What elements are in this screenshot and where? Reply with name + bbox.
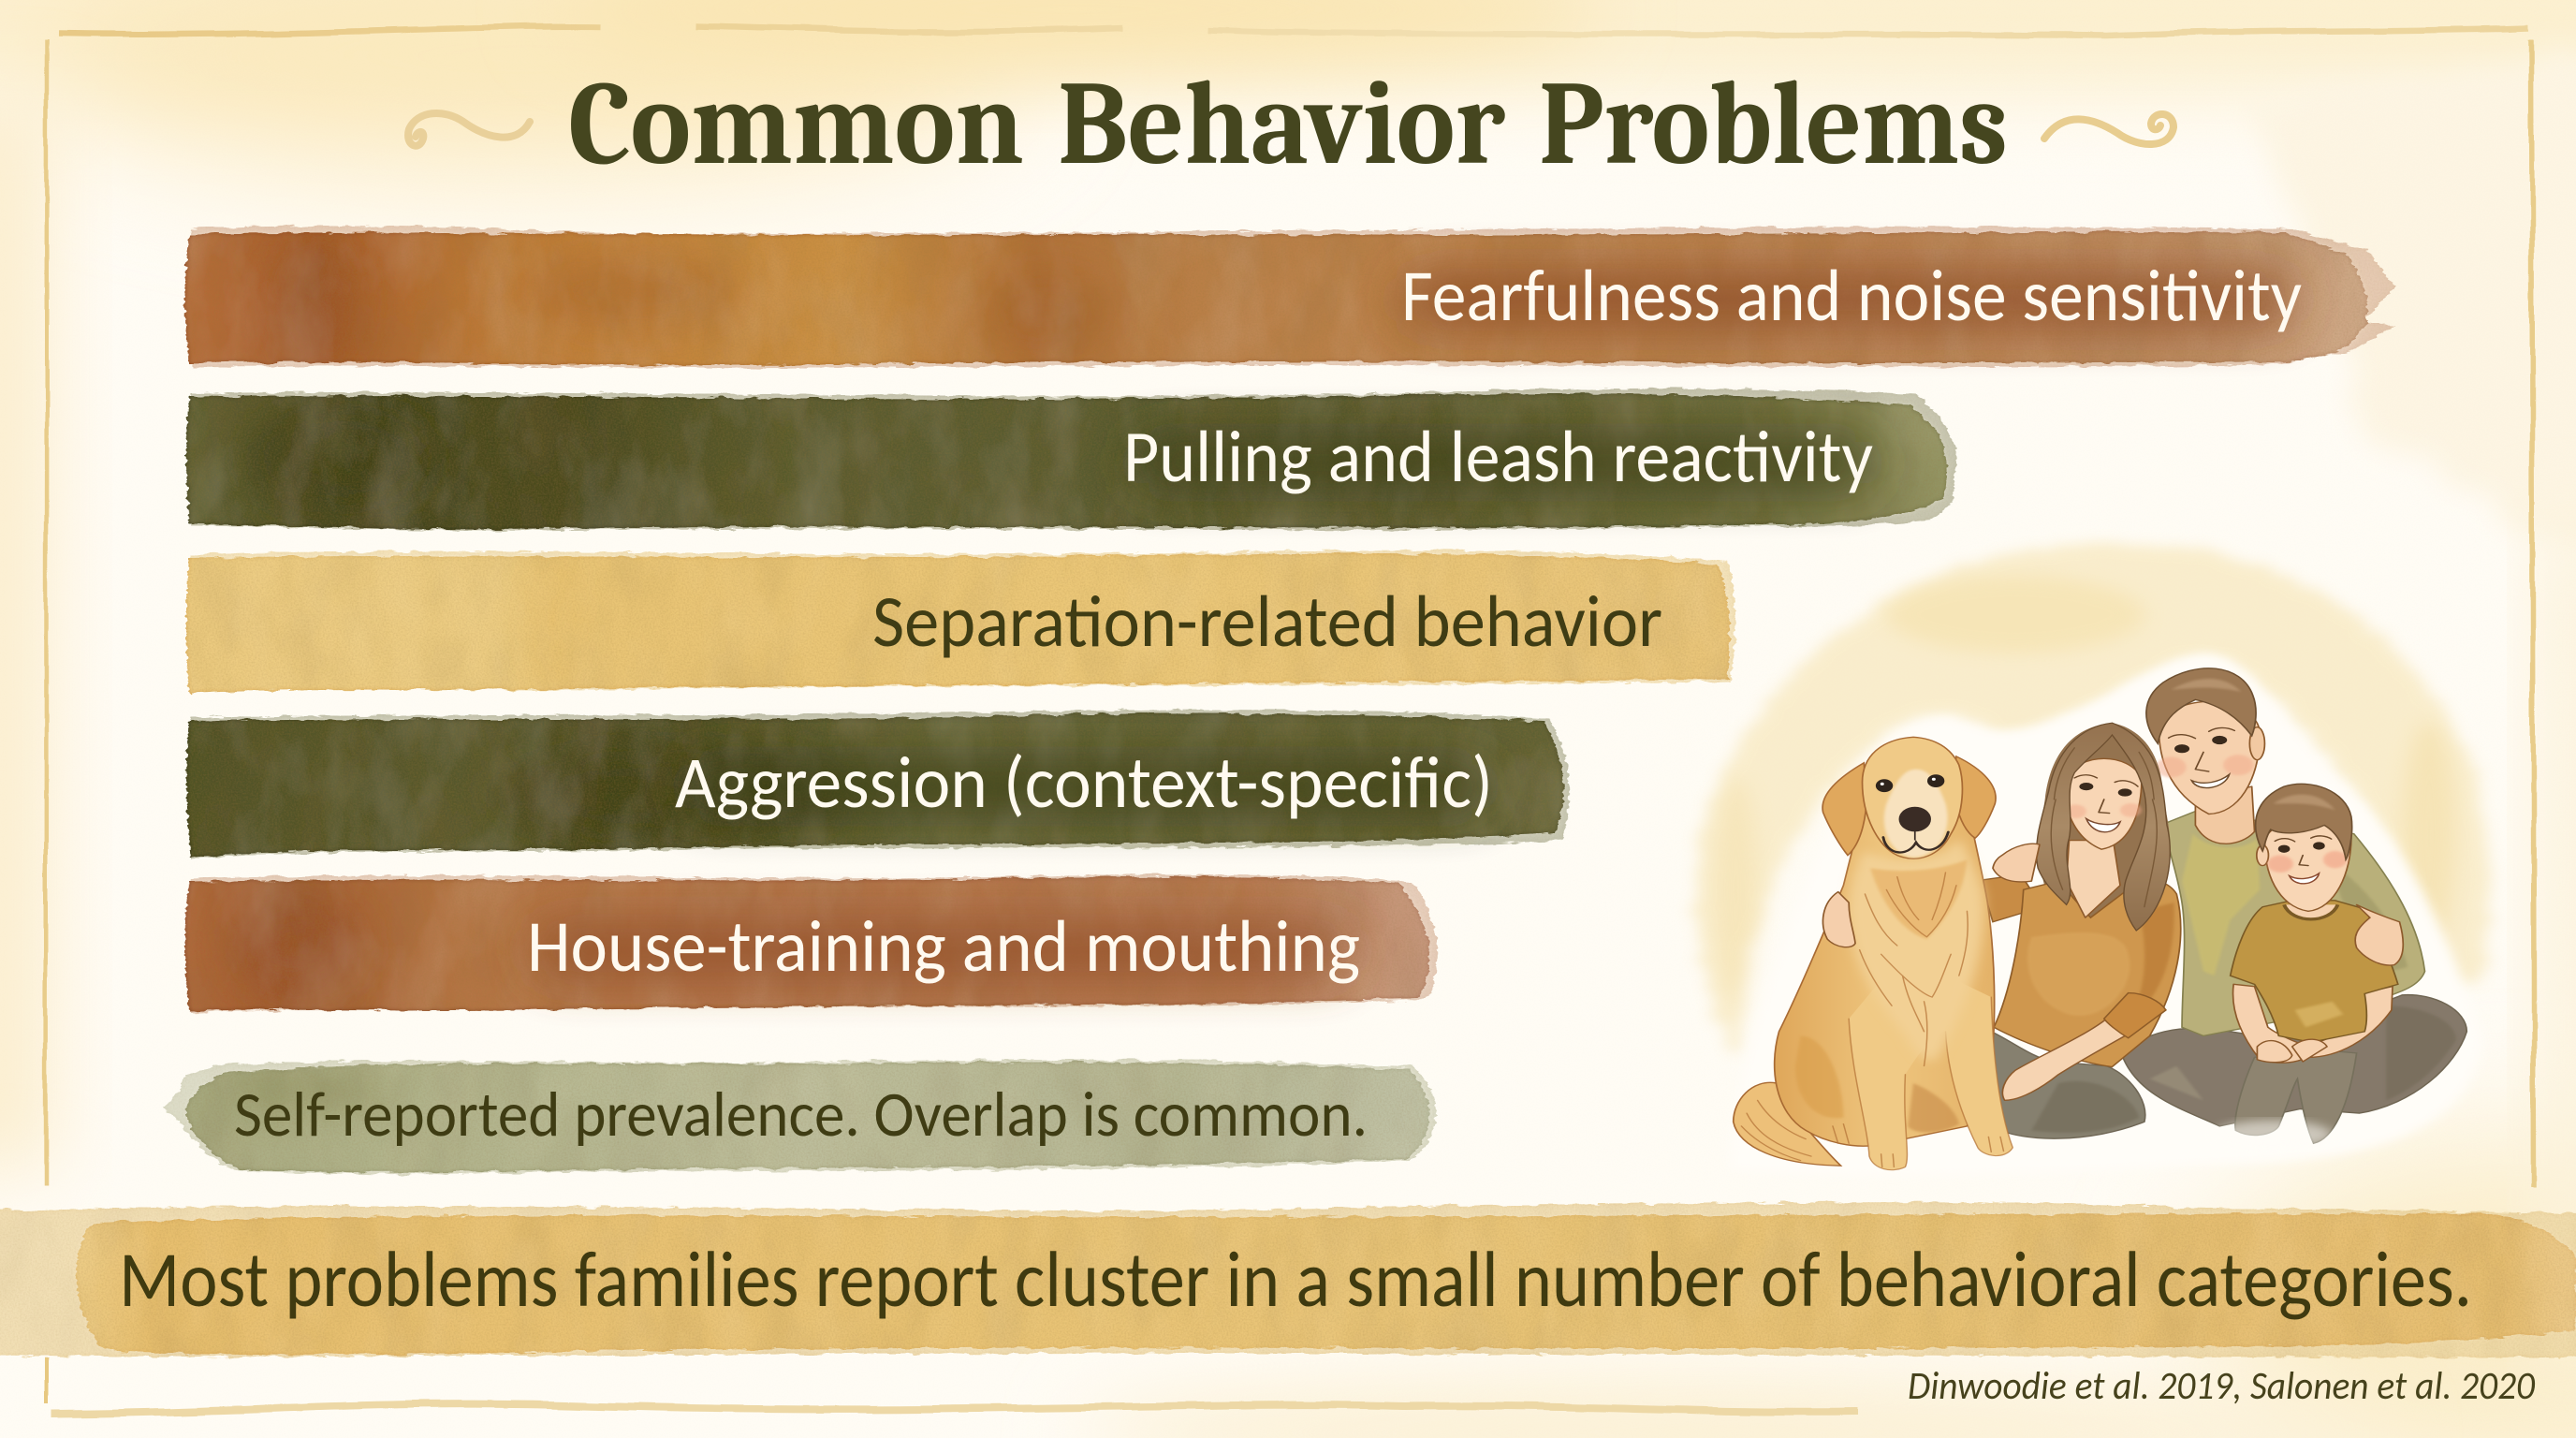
man face — [2159, 701, 2261, 814]
text glow — [1133, 440, 1872, 485]
heading text: Problems — [1539, 56, 2008, 193]
heading text — [568, 56, 2008, 193]
man features — [2169, 727, 2234, 788]
source citation: Dinwoodie et al. 2019, Salonen et al. 2020 — [1908, 1362, 2536, 1410]
man — [2123, 668, 2466, 1126]
man sweater — [2166, 808, 2424, 1035]
label: Aggression (context-specific) — [675, 738, 1493, 827]
bar: fearfulness and noise sensitivity — [187, 227, 2395, 370]
woman hair back — [2040, 723, 2170, 929]
man's hand on boy's shoulder — [2355, 904, 2403, 965]
boy head — [2265, 820, 2351, 911]
golden retriever — [1734, 737, 2012, 1170]
title — [408, 56, 2174, 193]
dog chest fur — [1849, 838, 1984, 1061]
woman neck — [2067, 841, 2120, 917]
bar: separation-related behavior — [185, 549, 1737, 695]
dog face — [1876, 774, 1948, 852]
hand on woman's shoulder — [1993, 844, 2040, 882]
bar: pulling and leash reactivity — [188, 389, 1956, 530]
flourish: right — [2044, 114, 2174, 144]
text glow — [1404, 276, 2293, 323]
flourish: left — [408, 113, 530, 146]
dog head — [1863, 737, 1962, 858]
boy — [2214, 784, 2403, 1150]
hand on dog — [1822, 892, 1855, 947]
woman arm behind dog — [1981, 874, 2042, 922]
woman face — [2065, 758, 2142, 849]
woman sweater — [1994, 879, 2181, 1067]
woman pants — [1985, 1032, 2145, 1138]
text glow — [534, 927, 1348, 974]
dog ears — [1822, 763, 1866, 856]
man hair — [2146, 668, 2256, 743]
dog body — [1775, 800, 1995, 1146]
boy arms — [2233, 984, 2393, 1063]
takeaway banner — [0, 1202, 2576, 1357]
boy hair — [2256, 784, 2352, 859]
heading text: Common — [568, 56, 1024, 193]
boy legs — [2235, 1049, 2357, 1143]
heading text: Behavior — [1058, 56, 1505, 193]
boy features — [2275, 836, 2332, 884]
dog front legs — [1849, 954, 2012, 1170]
woman — [1981, 723, 2181, 1138]
note text: Self-reported prevalence. Overlap is common. — [234, 1076, 1368, 1153]
illustration: family with golden retriever — [1695, 543, 2490, 1176]
text glow — [683, 763, 1488, 810]
dog tail — [1734, 1082, 1841, 1166]
man neck — [2195, 786, 2255, 844]
woman hair front — [2037, 723, 2170, 931]
boy hands — [2257, 1039, 2327, 1063]
label: Fearfulness and noise sensitivity — [1401, 251, 2302, 340]
label: Separation-related behavior — [872, 577, 1662, 666]
white glow behind figures — [1731, 653, 2482, 1176]
background arch wash — [1695, 543, 2490, 1055]
man legs — [2123, 995, 2466, 1126]
dog paws — [1833, 1124, 2003, 1167]
boy shirt — [2231, 901, 2398, 1042]
note: self-reported prevalence — [163, 1060, 1436, 1174]
label: House-training and mouthing — [527, 902, 1360, 990]
bar: house-training and mouthing — [187, 874, 1438, 1013]
bar: aggression (context-specific) — [188, 710, 1569, 859]
woman features — [2074, 775, 2138, 832]
label: Pulling and leash reactivity — [1123, 412, 1873, 501]
woman forearm and hand — [2002, 997, 2166, 1100]
